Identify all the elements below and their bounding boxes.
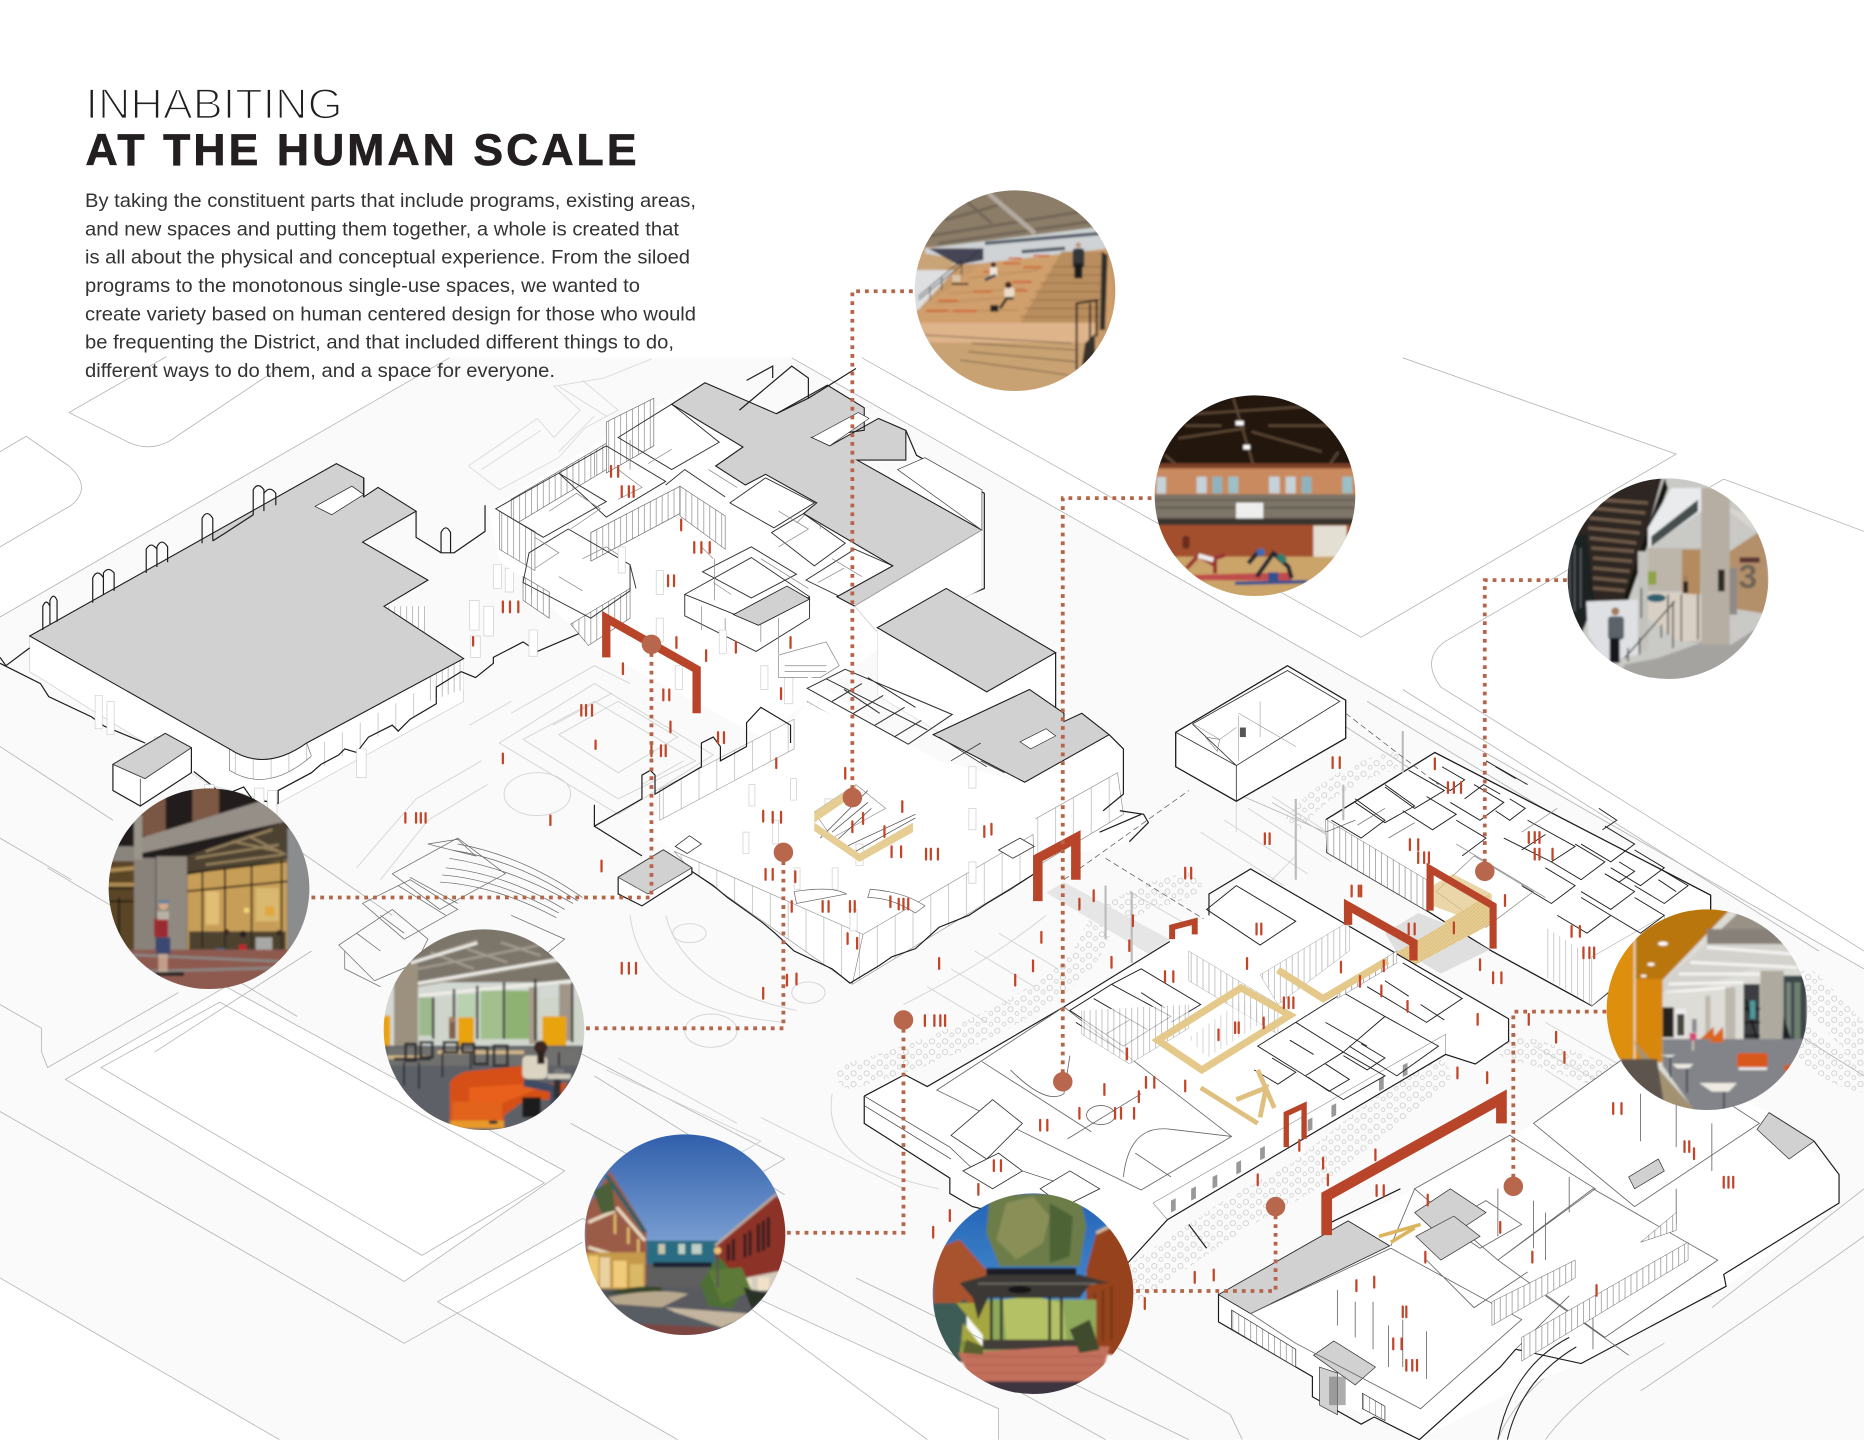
connector: orange corridor photo — [1513, 1012, 1611, 1186]
small grey-roofed box — [113, 733, 191, 806]
intro paragraph: programs to the monotonous single-use spaces, we wanted to — [85, 275, 640, 297]
plaza paving and paths — [357, 666, 1688, 1189]
photo circle: stepped wood seating — [914, 190, 1116, 391]
connector: library photo — [311, 644, 651, 898]
photo circle: interior stair and level 3 sign: 3 — [1739, 559, 1757, 596]
building H: right long block of rooms — [1325, 752, 1711, 1006]
building I: small service box — [1176, 666, 1346, 801]
pebble landscape bands — [850, 761, 1864, 1283]
amphitheatre and stepped seats — [339, 838, 583, 987]
dotted connector lines — [311, 291, 1611, 1291]
timber edged atrium — [1158, 988, 1290, 1070]
grey covered walkway — [1046, 713, 1438, 963]
portal 6 — [1286, 1106, 1304, 1147]
building E: open central hall — [594, 703, 1035, 984]
location markers — [642, 635, 1523, 1216]
timber stair — [1201, 1070, 1274, 1123]
photo circle: courtyard at dusk with skybridge — [584, 1134, 786, 1335]
photo circle: gymnasium yoga class — [1154, 395, 1356, 596]
timber bridge between buildings — [1385, 874, 1492, 974]
photo circle: library arcade with pedestrian — [108, 788, 310, 989]
connector: courtyard photo — [785, 1020, 903, 1233]
portal 1 — [606, 618, 697, 713]
amphitheatre seating ledges — [794, 889, 925, 913]
title — [86, 80, 636, 175]
building D: rooms strip and grey roof — [802, 669, 1148, 868]
foot line with pilasters — [0, 634, 597, 804]
building G: lower right block — [1218, 1046, 1839, 1440]
intro paragraph: different ways to do them, and a space for everyone. — [85, 360, 555, 382]
atrium stair with timber edge — [814, 785, 915, 862]
intro paragraph: is all about the physical and conceptual experience. From the siloed — [85, 247, 690, 269]
connector: canopy photo — [1129, 1207, 1276, 1291]
building B: upper centre rooms and cross-shaped roof — [487, 366, 984, 737]
grey step box — [618, 850, 692, 906]
hall columns — [743, 767, 976, 931]
red portal frames — [606, 618, 1501, 1235]
ghost columns — [95, 565, 537, 819]
intro paragraph — [85, 190, 696, 382]
connector: stepped seating photo — [852, 291, 915, 798]
intro paragraph: be frequenting the District, and that included different things to do, — [85, 332, 674, 354]
photo circle: interior stair and level 3 sign — [1568, 478, 1768, 679]
connector: lounge photo — [586, 852, 783, 1028]
ghost neighbouring building — [468, 359, 651, 490]
connector: stair photo — [1485, 580, 1569, 871]
portal 7: long red gateway — [1327, 1098, 1501, 1235]
intro paragraph: By taking the constituent parts that include programs, existing areas, — [85, 190, 696, 212]
right walls — [739, 366, 984, 598]
photo circle: orange corridor lounge — [1606, 909, 1808, 1110]
portal 2 — [1038, 838, 1076, 901]
curtain walls — [511, 398, 680, 561]
building F: gym and rooms with basketball court — [864, 869, 1509, 1262]
grey roof — [672, 383, 982, 606]
timber band — [1278, 961, 1387, 999]
site plan: axonometric drawing of the district — [0, 291, 1864, 1440]
stair between blocks — [779, 642, 839, 678]
connector: gym photo — [1063, 498, 1159, 1082]
building C: grey roof block — [877, 588, 1056, 761]
photo circle: lounge with orange couch — [384, 929, 584, 1130]
court — [937, 1007, 1232, 1190]
intro paragraph: create variety based on human centered design for those who would — [85, 303, 696, 325]
title line 2: AT THE HUMAN SCALE — [86, 126, 636, 175]
portal 4 — [1348, 906, 1413, 961]
long facade — [1153, 1034, 1446, 1220]
intro paragraph: and new spaces and putting them together, a whole is created that — [85, 218, 680, 240]
building A: large grey-roofed block — [0, 464, 597, 819]
jagged black outer wall — [594, 707, 1034, 983]
north wall and pilasters — [0, 478, 485, 666]
photo circle: entry canopy with tree — [932, 1193, 1134, 1394]
roof — [30, 464, 464, 759]
site ground — [0, 357, 1864, 1440]
portal 3 — [1172, 921, 1195, 939]
site road and block outlines — [0, 357, 1864, 1440]
room outlines — [496, 404, 893, 651]
black perimeter — [864, 869, 1509, 1262]
people silhouettes — [405, 466, 1733, 1371]
title line 1: INHABITING — [86, 80, 342, 128]
portal 5 — [1430, 869, 1493, 949]
rooms — [1070, 886, 1462, 1100]
